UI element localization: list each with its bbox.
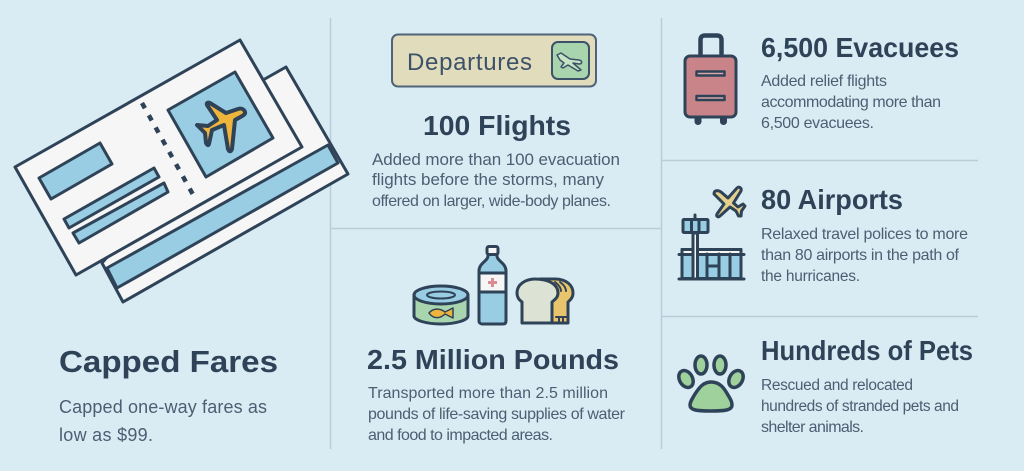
fish <box>429 308 453 318</box>
text bar two <box>73 183 168 243</box>
text: evacuees body: 6,500 evacuees. <box>761 115 874 132</box>
text: capped fares body: Capped one-way fares as <box>59 397 267 417</box>
perforation <box>142 103 196 200</box>
building <box>682 250 741 278</box>
icon: departures sign <box>392 34 596 86</box>
picture window <box>168 72 273 177</box>
heading: 100 flights: 100 Flights <box>423 110 571 141</box>
text: flights body: flights before the storms, many <box>372 170 604 189</box>
text: airports body: the hurricanes. <box>761 268 860 285</box>
tower <box>693 233 698 279</box>
heading: 2.5 million pounds: 2.5 Million Pounds <box>367 344 619 375</box>
text: airports body <box>761 226 968 285</box>
bread <box>540 279 573 323</box>
icon: departures sign: Departures <box>407 49 532 76</box>
text: pets body: hundreds of stranded pets and <box>761 398 959 415</box>
text: supplies body <box>368 385 626 444</box>
icon: food and water supplies <box>414 246 573 324</box>
text: airports body: than 80 airports in the path of <box>761 247 960 264</box>
icon: suitcase <box>685 36 736 125</box>
text: flights body: offered on larger, wide-body planes. <box>372 193 611 210</box>
text: flights body: Added more than 100 evacuation <box>372 150 620 169</box>
text: evacuees body <box>761 73 941 132</box>
bottle <box>479 254 506 324</box>
back ticket <box>102 67 348 302</box>
front ticket <box>15 40 302 275</box>
heading: hundreds of pets: Hundreds of Pets <box>761 335 973 366</box>
text: supplies body: Transported more than 2.5 million <box>368 385 608 402</box>
icon: boarding tickets <box>15 40 348 302</box>
heading: capped fares: Capped Fares <box>59 344 278 379</box>
icon: paw print <box>676 356 746 411</box>
text: pets body: shelter animals. <box>761 419 864 436</box>
text: pets body: Rescued and relocated <box>761 377 913 394</box>
back ticket stripe <box>107 145 338 288</box>
text: pets body <box>761 377 959 436</box>
can <box>414 295 468 324</box>
text: capped fares body <box>59 397 267 445</box>
text bar one <box>64 168 159 228</box>
heading: 80 airports: 80 Airports <box>761 184 903 215</box>
icon: airport and plane <box>679 187 745 279</box>
text: supplies body: and food to impacted areas. <box>368 427 553 444</box>
text: evacuees body: accommodating more than <box>761 94 941 111</box>
plane on ticket <box>197 103 245 151</box>
text: supplies body: pounds of life-saving supplies of water <box>368 406 626 423</box>
text: evacuees body: Added relief flights <box>761 73 887 90</box>
name field <box>39 143 112 199</box>
text: airports body: Relaxed travel polices to more <box>761 226 968 243</box>
text: flights body <box>372 150 620 210</box>
plane <box>714 187 745 217</box>
heading: 6,500 evacuees: 6,500 Evacuees <box>761 32 959 63</box>
text: capped fares body: low as $99. <box>59 425 153 445</box>
